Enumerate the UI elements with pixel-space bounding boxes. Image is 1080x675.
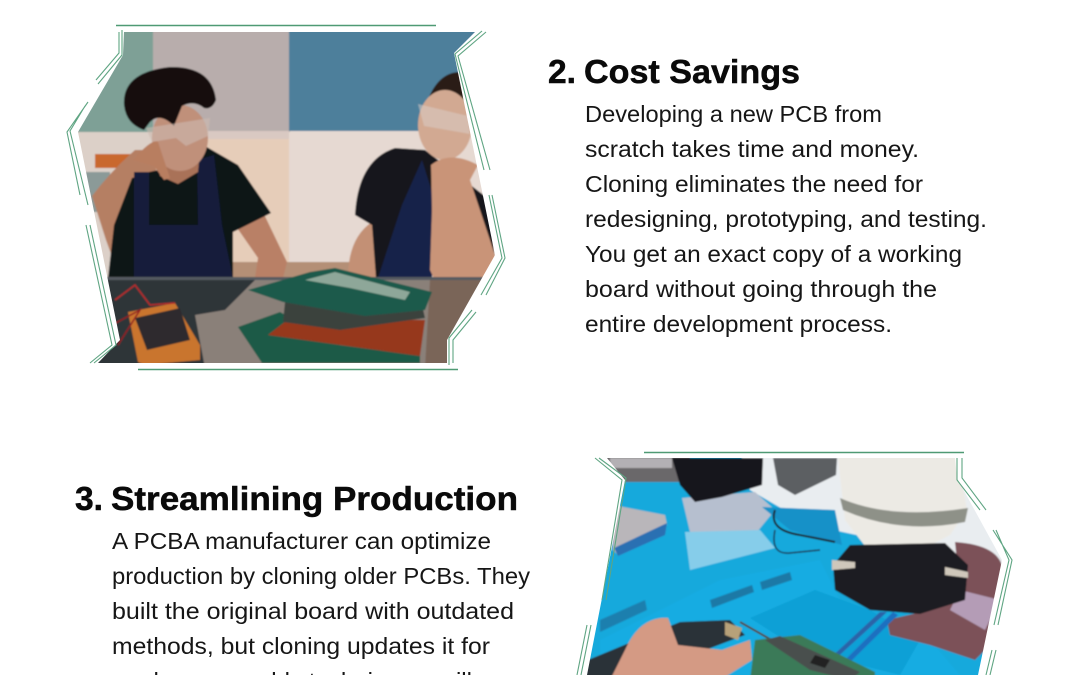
text block: cost savings description: board without going through the — [585, 276, 937, 302]
man right arm — [238, 215, 288, 277]
man left arm — [92, 150, 158, 262]
green circuit frame lines — [67, 30, 505, 365]
heading: 2. Cost Savings: 2. — [548, 53, 576, 90]
text block: streamlining production description: production by cloning older PCBs. They — [112, 563, 530, 589]
stacked boards — [238, 312, 420, 363]
microscope arm and glare — [682, 492, 775, 532]
multimeter — [128, 303, 200, 365]
text block: cost savings description: Developing a new PCB from — [585, 101, 882, 127]
green circuit frame lines — [577, 458, 1012, 675]
blue mat highlights — [751, 590, 918, 674]
heading: 3. Streamlining Production: Streamlining Production — [111, 480, 518, 517]
text block: streamlining production description: A PCBA manufacturer can optimize — [112, 528, 491, 554]
text block: streamlining production description: built the original board with outdated — [112, 598, 514, 624]
microscope ring — [833, 543, 968, 614]
woman forearm — [428, 156, 495, 278]
woman left arm — [348, 222, 376, 278]
right hand — [887, 542, 1003, 660]
tweezers — [846, 612, 898, 661]
circuit board — [750, 635, 875, 675]
heading: 2. Cost Savings: Cost Savings — [584, 53, 800, 90]
microscope lens and arm — [672, 458, 763, 502]
woman shirt — [355, 148, 496, 278]
man apron — [134, 155, 233, 278]
text block: cost savings description: You get an exact copy of a working — [585, 241, 962, 267]
heading: 3. Streamlining Production: 3. — [75, 480, 103, 517]
microscope white body — [838, 458, 966, 546]
photo: two technicians looking at circuit boards — [67, 25, 505, 370]
man face — [158, 162, 200, 186]
grey pad — [613, 505, 667, 555]
man shirt — [108, 146, 271, 278]
table — [194, 278, 431, 363]
text block: cost savings description: Cloning eliminates the need for — [585, 171, 923, 197]
photo: soldering a circuit board under a microscope — [577, 450, 1012, 675]
text block: cost savings description: redesigning, prototyping, and testing. — [585, 206, 987, 232]
soldering tool and hand — [585, 620, 745, 675]
text block: cost savings description: entire development process. — [585, 311, 892, 337]
text block: streamlining production description: methods, but cloning updates it for — [112, 633, 490, 659]
text block: cost savings description: scratch takes time and money. — [585, 136, 919, 162]
text block: streamlining production description — [112, 528, 530, 675]
text block: cost savings description — [585, 101, 987, 337]
